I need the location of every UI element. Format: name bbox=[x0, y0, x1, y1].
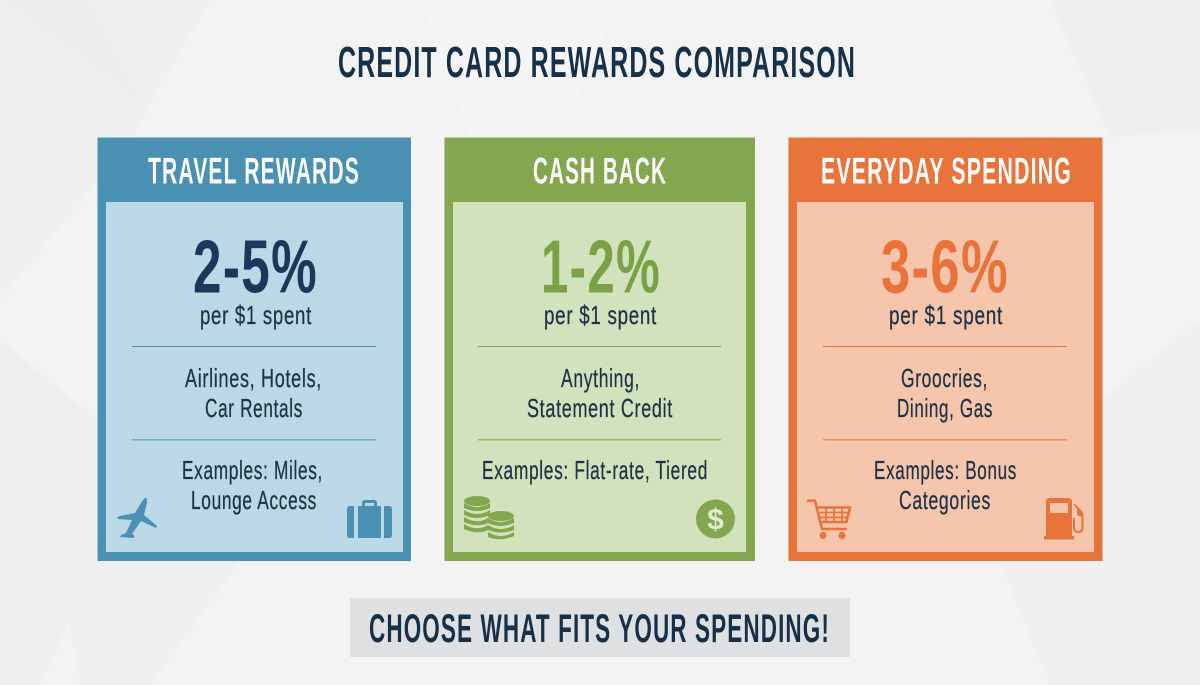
rate unit: per $1 spent bbox=[889, 300, 1003, 330]
examples text: Categories bbox=[899, 485, 991, 515]
panel: travel rewards bbox=[98, 138, 411, 561]
categories text bbox=[897, 363, 993, 423]
categories text: Airlines, Hotels, bbox=[185, 363, 322, 393]
icon: dollar coin: $ bbox=[707, 504, 724, 536]
categories text: Statement Credit bbox=[527, 393, 673, 423]
rate unit: per $1 spent bbox=[544, 300, 657, 330]
categories text: Car Rentals bbox=[205, 393, 303, 423]
icon: shopping cart bbox=[807, 501, 850, 538]
categories text: Dining, Gas bbox=[897, 393, 993, 423]
examples text: Lounge Access bbox=[191, 485, 317, 515]
rate unit: per $1 spent bbox=[200, 300, 312, 330]
examples text bbox=[182, 455, 323, 515]
rate: 3-6%: 3-6% bbox=[881, 224, 1009, 308]
icon: dollar coin bbox=[696, 500, 735, 538]
panel: everyday spending bbox=[788, 138, 1102, 561]
examples text: Examples: Miles, bbox=[182, 455, 323, 485]
call to action banner bbox=[350, 598, 850, 657]
icon: fuel pump bbox=[1044, 498, 1084, 540]
categories text: Anything, bbox=[561, 363, 640, 393]
icon: airplane bbox=[117, 498, 157, 538]
icon: suitcase bbox=[347, 500, 392, 538]
examples text: Examples: Flat-rate, Tiered bbox=[482, 455, 708, 485]
categories text: Groocries, bbox=[901, 363, 988, 393]
categories text bbox=[185, 363, 322, 423]
rate: 1-2%: 1-2% bbox=[541, 224, 661, 308]
rate: 2-5%: 2-5% bbox=[193, 224, 318, 308]
call to action text: CHOOSE WHAT FITS YOUR SPENDING! bbox=[369, 607, 830, 651]
heading: travel rewards: TRAVEL REWARDS bbox=[148, 150, 360, 192]
categories text bbox=[527, 363, 673, 423]
icon: coin stacks bbox=[464, 496, 514, 539]
examples text bbox=[874, 455, 1017, 515]
examples text: Examples: Bonus bbox=[874, 455, 1017, 485]
panel: cash back bbox=[444, 138, 755, 561]
heading: cash back: CASH BACK bbox=[533, 150, 667, 192]
